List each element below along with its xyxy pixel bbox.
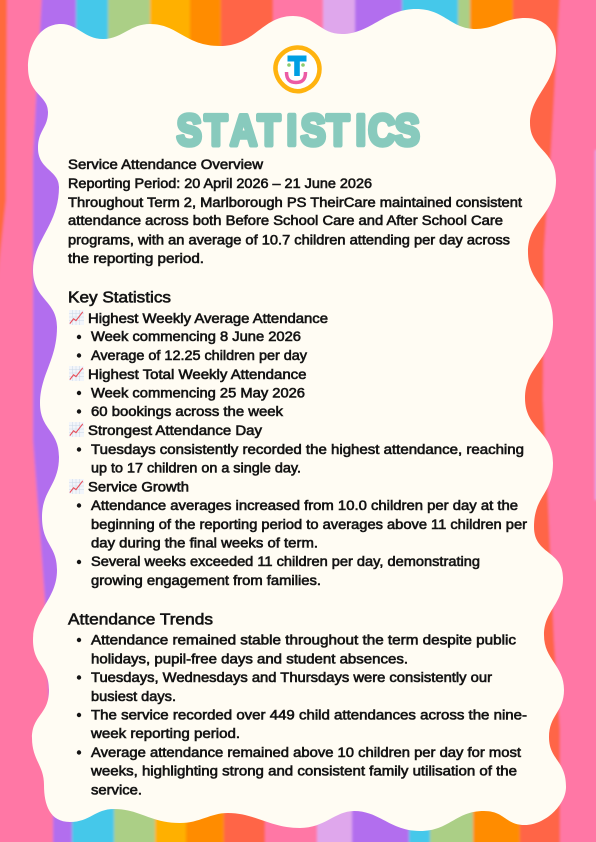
icon: chart emoji [69, 310, 84, 325]
title: STATISTICS [177, 105, 420, 155]
list: key statistics: beginning of the reporting period to averages above 11 children per [91, 517, 528, 532]
text block: service attendance overview: the reporting period. [68, 251, 204, 266]
list: key statistics: Week commencing 25 May 2026 [91, 386, 305, 400]
list: key statistics: Strongest Attendance Day [88, 423, 262, 438]
text block: service attendance overview: Service Attendance Overview [68, 157, 263, 172]
list: attendance trends: The service recorded over 449 child attendances across the nine- [91, 708, 527, 722]
list: attendance trends: service. [91, 782, 142, 798]
list: attendance trends: Attendance remained stable throughout the term despite public [91, 632, 516, 648]
icon: chart emoji [69, 422, 84, 437]
heading: attendance trends: Attendance Trends [68, 612, 213, 628]
icon: chart emoji [69, 479, 84, 494]
text block: service attendance overview: Throughout Term 2, Marlborough PS TheirCare maintained consistent [68, 195, 522, 210]
list: key statistics: Attendance averages increased from 10.0 children per day at the [91, 498, 518, 513]
list: key statistics: day during the final weeks of term. [91, 536, 318, 550]
list: attendance trends: holidays, pupil-free days and student absences. [91, 652, 408, 666]
list: key statistics: Tuesdays consistently recorded the highest attendance, reaching [91, 442, 524, 457]
text block: service attendance overview: attendance across both Before School Care and After School Care [68, 213, 503, 228]
list: attendance trends: Tuesdays, Wednesdays and Thursdays were consistently our [91, 670, 493, 685]
list: key statistics: Several weeks exceeded 11 children per day, demonstrating [91, 554, 480, 569]
list: key statistics [69, 310, 528, 588]
list: attendance trends [77, 632, 527, 798]
list: key statistics: growing engagement from families. [91, 573, 321, 588]
text block: service attendance overview: Reporting Period: 20 April 2026 – 21 June 2026 [68, 176, 372, 191]
list: attendance trends: weeks, highlighting strong and consistent family utilisation of the [90, 764, 517, 778]
list: key statistics: Service Growth [88, 480, 189, 494]
list: key statistics: Highest Total Weekly Attendance [88, 367, 306, 382]
list: key statistics: Week commencing 8 June 2026 [91, 329, 301, 344]
heading: key statistics: Key Statistics [68, 290, 171, 306]
icon: smiling T logo [275, 47, 320, 91]
list: attendance trends: busiest days. [91, 689, 176, 704]
list: key statistics: 60 bookings across the week [91, 404, 283, 419]
list: key statistics: Highest Weekly Average Attendance [88, 311, 328, 326]
text block: service attendance overview [68, 157, 522, 266]
text block: service attendance overview: programs, with an average of 10.7 children attending per day across [68, 232, 510, 248]
list: key statistics: up to 17 children on a single day. [91, 460, 301, 476]
list: attendance trends: Average attendance remained above 10 children per day for most [91, 745, 521, 760]
icon: chart emoji [69, 366, 84, 381]
list: key statistics: Average of 12.25 children per day [91, 348, 307, 363]
list: attendance trends: week reporting period. [90, 726, 240, 741]
